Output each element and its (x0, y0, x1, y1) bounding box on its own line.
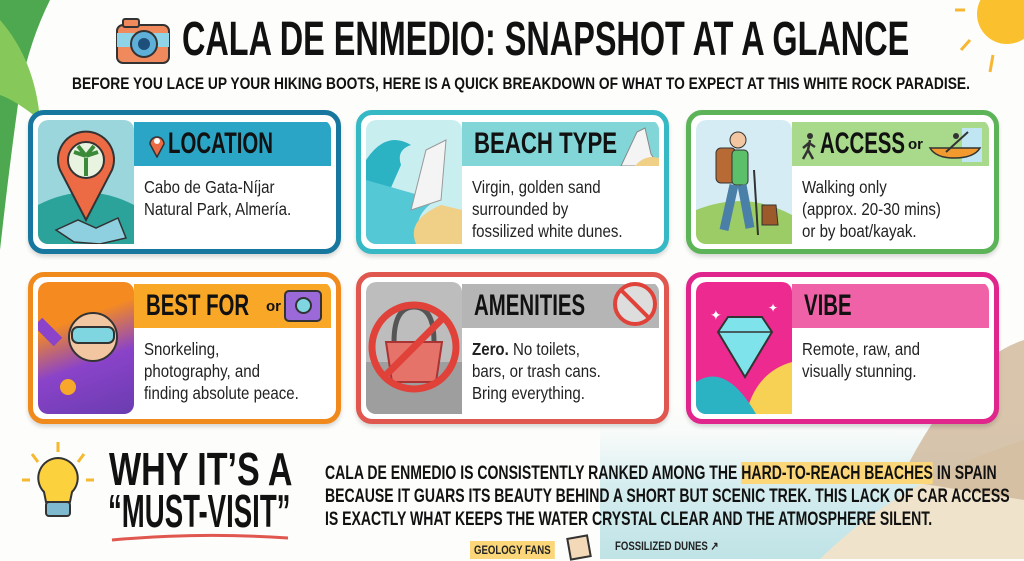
icon: no basket (366, 282, 462, 414)
text: best for: finding absolute peace. (144, 383, 299, 403)
panel: location (28, 110, 341, 254)
title: CALA DE ENMEDIO: SNAPSHOT AT A GLANCE (182, 13, 909, 66)
header: location (134, 122, 331, 166)
text: amenities: Bring everything. (472, 383, 585, 403)
text: best for (144, 339, 299, 403)
decor: beach scene (600, 340, 1024, 559)
panel: vibe (686, 272, 999, 424)
text: amenities: Zero. No toilets, (472, 339, 580, 359)
text: beach type: surrounded by (472, 199, 568, 219)
header: best for (134, 284, 331, 328)
decor: sun (955, 0, 1024, 72)
panel: beach type (356, 110, 669, 254)
header: access: or (908, 136, 923, 153)
decor: red underline (112, 534, 288, 542)
header: amenities: AMENITIES (474, 289, 585, 322)
header: vibe: VIBE (804, 289, 852, 322)
text: access: Walking only (802, 177, 887, 197)
decor: palm leaves (0, 0, 50, 250)
text: why paragraph (325, 462, 1010, 530)
text: amenities (472, 339, 601, 403)
text: beach type: Virgin, golden sand (472, 177, 601, 197)
header: beach type (462, 122, 659, 166)
icon: camera (116, 18, 170, 64)
icon: map pin (38, 120, 134, 244)
header: location: LOCATION (168, 127, 273, 160)
text: why paragraph: CALA DE ENMEDIO IS CONSISTENTLY RANKED AMONG THE HARD-TO-REACH BEACHES IN SPAIN (325, 462, 997, 484)
text: why paragraph: BECAUSE IT GUARS ITS BEAUTY BEHIND A SHORT BUT SCENIC TREK. THIS LACK OF CAR ACCESS (325, 485, 1010, 507)
text: location (144, 177, 291, 219)
subtitle: BEFORE YOU LACE UP YOUR HIKING BOOTS, HERE IS A QUICK BREAKDOWN OF WHAT TO EXPECT AT THIS WHITE ROCK PARADISE. (72, 74, 970, 93)
panel: access (686, 110, 999, 254)
icon: diamond: ✦ (768, 301, 778, 315)
icon: hiker (696, 120, 792, 244)
tags: geology fans / fossilized dunes (470, 534, 719, 561)
text: amenities: bars, or trash cans. (472, 361, 601, 381)
heading: why it's a must-visit: “MUST-VISIT” (108, 485, 290, 537)
text: vibe (802, 339, 920, 381)
tags: geology fans / fossilized dunes: FOSSILIZED DUNES ↗ (615, 539, 719, 553)
text: beach type: fossilized white dunes. (472, 221, 623, 241)
header: access: ACCESS (820, 127, 905, 160)
header: best for: or (266, 298, 281, 315)
heading: why it's a must-visit: WHY IT’S A (109, 443, 292, 495)
text: access (802, 177, 941, 241)
panel: amenities (356, 272, 669, 424)
text: best for: Snorkeling, (144, 339, 219, 359)
text: vibe: Remote, raw, and (802, 339, 920, 359)
text: location: Natural Park, Almería. (144, 199, 291, 219)
header: vibe (792, 284, 989, 328)
icon: wave (366, 120, 462, 244)
text: best for: photography, and (144, 361, 260, 381)
text: beach type (472, 177, 623, 241)
text: access: or by boat/kayak. (802, 221, 917, 241)
text: access: (approx. 20-30 mins) (802, 199, 941, 219)
icon: snorkeler (38, 282, 134, 414)
text: vibe: visually stunning. (802, 361, 917, 381)
heading: why it's a must-visit (108, 443, 292, 537)
header: access (792, 122, 989, 166)
panel: best for (28, 272, 341, 424)
icon: diamond (696, 282, 792, 414)
text: why paragraph: IS EXACTLY WHAT KEEPS THE WATER CRYSTAL CLEAR AND THE ATMOSPHERE SILENT. (325, 508, 932, 530)
header: beach type: BEACH TYPE (474, 127, 617, 160)
header: best for: BEST FOR (146, 289, 249, 322)
text: location: Cabo de Gata-Níjar (144, 177, 275, 197)
icon: diamond: ✦ (710, 307, 722, 323)
header: amenities (462, 284, 659, 328)
tags: geology fans / fossilized dunes: GEOLOGY FANS (474, 543, 551, 557)
icon: light bulb (22, 442, 94, 517)
